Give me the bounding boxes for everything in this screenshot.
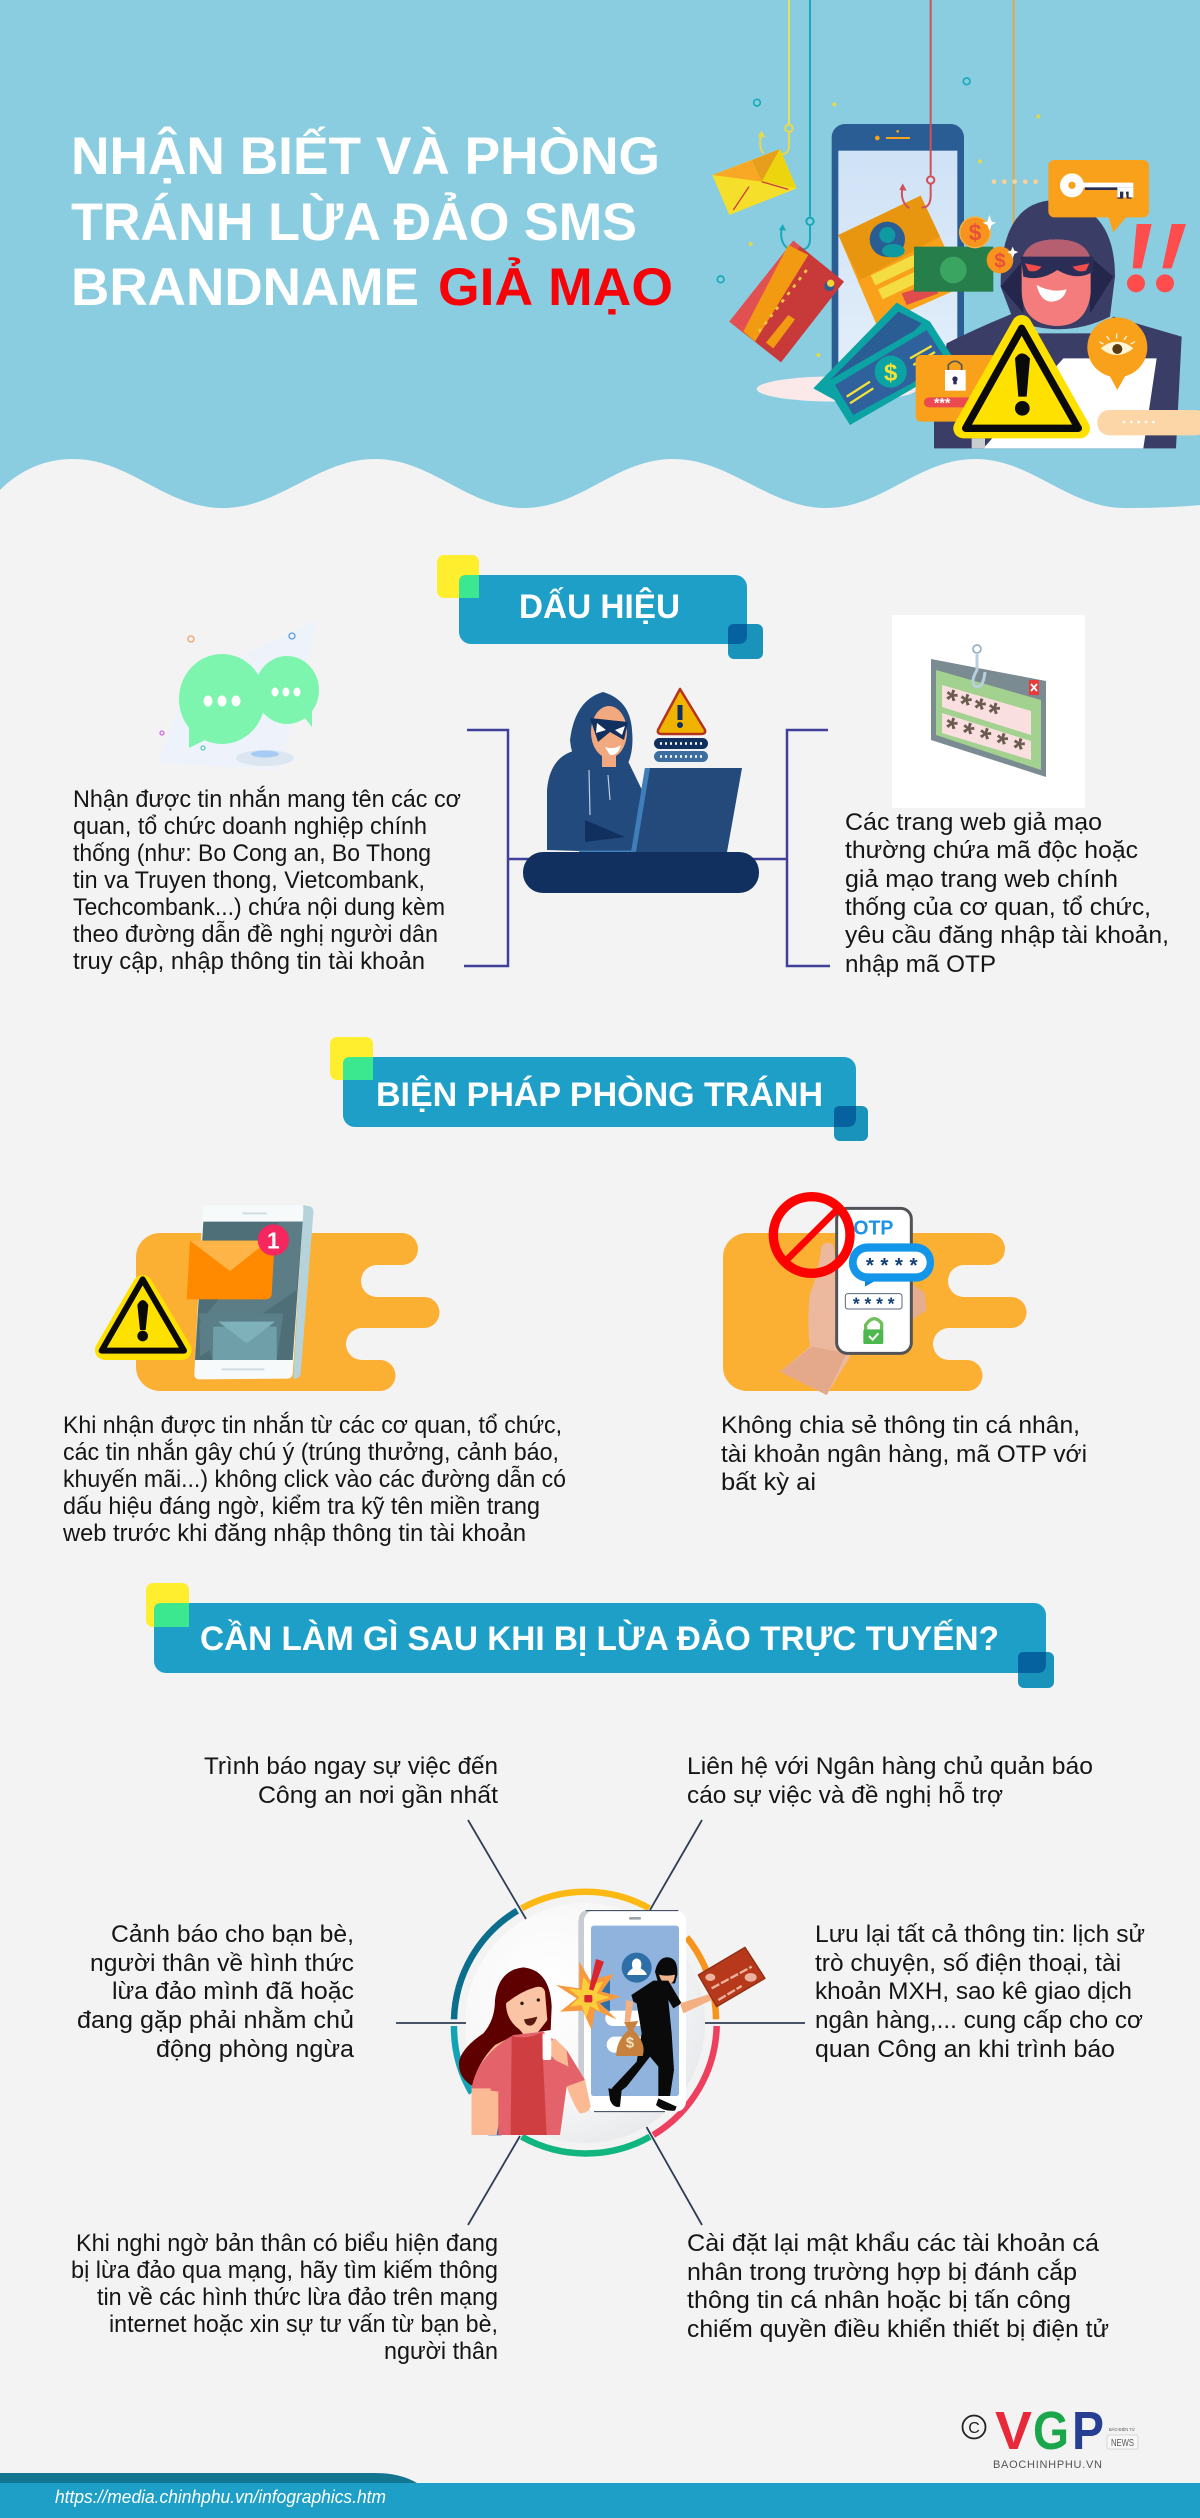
heading: CẦN LÀM GÌ SAU KHI BỊ LỪA ĐẢO TRỰC TUYẾN?: CẦN LÀM GÌ SAU KHI BỊ LỪA ĐẢO TRỰC TUYẾN? <box>200 1620 999 1658</box>
text: biện pháp 1: các tin nhắn gây chú ý (trúng thưởng, cảnh báo, <box>63 1439 559 1466</box>
text: nghi ngờ bị lừa đảo: tin về các hình thức lừa đảo trên mạng <box>97 2284 498 2311</box>
heading: BIỆN PHÁP PHÒNG TRÁNH <box>330 1037 868 1141</box>
text: trình báo công an <box>204 1753 498 1809</box>
text: liên hệ ngân hàng: cáo sự việc và đề nghị hỗ trợ <box>687 1782 1003 1809</box>
illustration: do not share OTP <box>723 1197 1026 1395</box>
illustration: woman and thief <box>459 1911 765 2135</box>
icon: chat bubbles <box>157 620 319 770</box>
text: liên hệ ngân hàng <box>687 1753 1093 1809</box>
illustration: phishing hacker: $ <box>884 360 897 387</box>
hand and phone <box>773 1197 934 1395</box>
heading: DẤU HIỆU: DẤU HIỆU <box>519 588 680 626</box>
text: trang web giả mạo: Các trang web giả mạo <box>845 809 1102 836</box>
text: lưu lại thông tin: ngân hàng,... cung cấp cho cơ <box>815 2007 1143 2034</box>
title: GIẢ MẠO <box>438 257 673 317</box>
text: cảnh báo bạn bè: lừa đảo mình đã hoặc <box>112 1978 354 2005</box>
text: lưu lại thông tin: trò chuyện, số điện thoại, tài <box>815 1950 1121 1977</box>
icon: phishing web window: **** <box>940 683 1003 731</box>
illustration: suspicious message <box>102 1205 439 1391</box>
text: biện pháp 2: Không chia sẻ thông tin cá nhân, <box>721 1412 1080 1439</box>
text: cài đặt lại mật khẩu <box>687 2230 1109 2343</box>
text: biện pháp 2 <box>721 1412 1087 1496</box>
text: lưu lại thông tin: quan Công an khi trình báo <box>815 2036 1115 2063</box>
logo: VGP News: BÁO ĐIỆN TỬ <box>1109 2425 1135 2432</box>
text: trình báo công an: Công an nơi gần nhất <box>258 1782 498 1809</box>
title: TRÁNH LỪA ĐẢO SMS <box>71 192 637 252</box>
text: trang web giả mạo: nhập mã OTP <box>845 951 996 978</box>
panel: header background <box>0 0 1200 508</box>
text: cài đặt lại mật khẩu: nhân trong trường hợp bị đánh cắp <box>687 2259 1077 2286</box>
logo: VGP News: NEWS <box>1111 2438 1134 2449</box>
hand and phone: **** <box>866 1254 918 1277</box>
text: cài đặt lại mật khẩu: thông tin cá nhân hoặc bị tấn công <box>687 2287 1071 2314</box>
text: cài đặt lại mật khẩu: chiếm quyền điều khiển thiết bị điện tử <box>687 2316 1109 2343</box>
heading: BIỆN PHÁP PHÒNG TRÁNH: BIỆN PHÁP PHÒNG TRÁNH <box>376 1076 823 1114</box>
heading: DẤU HIỆU <box>437 555 763 659</box>
text: cảnh báo bạn bè: động phòng ngừa <box>156 2036 355 2063</box>
text: lưu lại thông tin: Lưu lại tất cả thông tin: lịch sử <box>815 1921 1145 1948</box>
logo: VGP News: BAOCHINHPHU.VN <box>993 2459 1102 2471</box>
diagram: ring with connector lines <box>396 1820 805 2225</box>
text: trang web giả mạo: thống của cơ quan, tổ chức, <box>845 894 1151 921</box>
phone with envelope: 1 <box>267 1227 280 1253</box>
hand and phone: **** <box>853 1293 895 1313</box>
footer link: https://media.chinhphu.vn/infographics.htm <box>55 2487 386 2507</box>
text: cảnh báo bạn bè: người thân về hình thức <box>90 1950 354 1977</box>
orange blob <box>136 1233 439 1391</box>
text: tin nhắn giả mạo <box>73 786 461 975</box>
text: trang web giả mạo <box>845 809 1169 978</box>
text: tin nhắn giả mạo: theo đường dẫn đề nghị người dân <box>73 921 438 948</box>
text: biện pháp 1 <box>62 1412 566 1547</box>
text: trang web giả mạo: thường chứa mã độc hoặc <box>845 837 1138 864</box>
text: biện pháp 1: dấu hiệu đáng ngờ, kiểm tra kỹ tên miền trang <box>63 1493 540 1520</box>
orange blob <box>723 1233 1026 1391</box>
text: liên hệ ngân hàng: Liên hệ với Ngân hàng chủ quản báo <box>687 1753 1093 1780</box>
text: nghi ngờ bị lừa đảo: Khi nghi ngờ bản thân có biểu hiện đang <box>76 2230 498 2257</box>
footer bar <box>0 2473 1200 2518</box>
text: cài đặt lại mật khẩu: Cài đặt lại mật khẩu các tài khoản cá <box>687 2230 1100 2257</box>
text: cảnh báo bạn bè: đang gặp phải nhằm chủ <box>77 2007 354 2034</box>
text: biện pháp 2: tài khoản ngân hàng, mã OTP với <box>721 1441 1087 1468</box>
text: biện pháp 2: bất kỳ ai <box>721 1469 816 1496</box>
illustration: hacker with laptop <box>464 689 830 966</box>
text: tin nhắn giả mạo: quan, tổ chức doanh nghiệp chính <box>73 813 427 840</box>
text: lưu lại thông tin <box>815 1921 1145 2063</box>
text: cảnh báo bạn bè <box>77 1921 355 2063</box>
text: lưu lại thông tin: khoản MXH, sao kê giao dịch <box>815 1978 1132 2005</box>
text: tin nhắn giả mạo: Techcombank...) chứa nội dung kèm <box>73 894 445 921</box>
text: trang web giả mạo: yêu cầu đăng nhập tài khoản, <box>845 922 1169 949</box>
logo: VGP News <box>962 2401 1138 2471</box>
title: BRANDNAME <box>71 258 419 317</box>
icon: phishing web window <box>892 615 1085 808</box>
logo: VGP News: P <box>1072 2401 1104 2461</box>
illustration: woman and thief: $ <box>626 2036 634 2052</box>
hand and phone: OTP <box>853 1216 894 1239</box>
text: nghi ngờ bị lừa đảo <box>71 2230 498 2365</box>
text: nghi ngờ bị lừa đảo: bị lừa đảo qua mạng, hãy tìm kiếm thông <box>71 2257 498 2284</box>
text: biện pháp 1: web trước khi đăng nhập thông tin tài khoản <box>62 1520 526 1547</box>
text: tin nhắn giả mạo: truy cập, nhập thông tin tài khoản <box>73 948 425 975</box>
text: nghi ngờ bị lừa đảo: người thân <box>384 2338 498 2365</box>
logo: VGP News: G <box>1033 2401 1069 2461</box>
title: NHẬN BIẾT VÀ PHÒNG <box>71 125 660 186</box>
text: biện pháp 1: Khi nhận được tin nhắn từ các cơ quan, tổ chức, <box>63 1412 562 1439</box>
icon: phishing web window: ***** <box>940 711 1028 767</box>
text: biện pháp 1: khuyến mãi...) không click vào các đường dẫn có <box>63 1466 566 1493</box>
text: trình báo công an: Trình báo ngay sự việc đến <box>204 1753 498 1780</box>
text: tin nhắn giả mạo: tin va Truyen thong, Vietcombank, <box>73 867 425 894</box>
phone with envelope <box>102 1205 313 1379</box>
illustration: phishing hacker: $ <box>969 220 982 246</box>
illustration: phishing hacker <box>712 0 1200 448</box>
text: tin nhắn giả mạo: thống (như: Bo Cong an, Bo Thong <box>73 840 431 867</box>
text: cảnh báo bạn bè: Cảnh báo cho bạn bè, <box>111 1921 354 1948</box>
logo: VGP News: C <box>968 2420 980 2437</box>
illustration: phishing hacker: $ <box>994 250 1006 272</box>
text: nghi ngờ bị lừa đảo: internet hoặc xin sự tư vấn từ bạn bè, <box>109 2311 498 2338</box>
text: tin nhắn giả mạo: Nhận được tin nhắn mang tên các cơ <box>73 786 461 813</box>
text: trang web giả mạo: giả mạo trang web chính <box>845 866 1118 893</box>
illustration: phishing hacker: *** <box>934 394 951 410</box>
title <box>71 125 673 317</box>
heading: CẦN LÀM GÌ SAU KHI BỊ LỪA ĐẢO TRỰC TUYẾN? <box>146 1583 1054 1688</box>
logo: VGP News: V <box>995 2401 1032 2461</box>
